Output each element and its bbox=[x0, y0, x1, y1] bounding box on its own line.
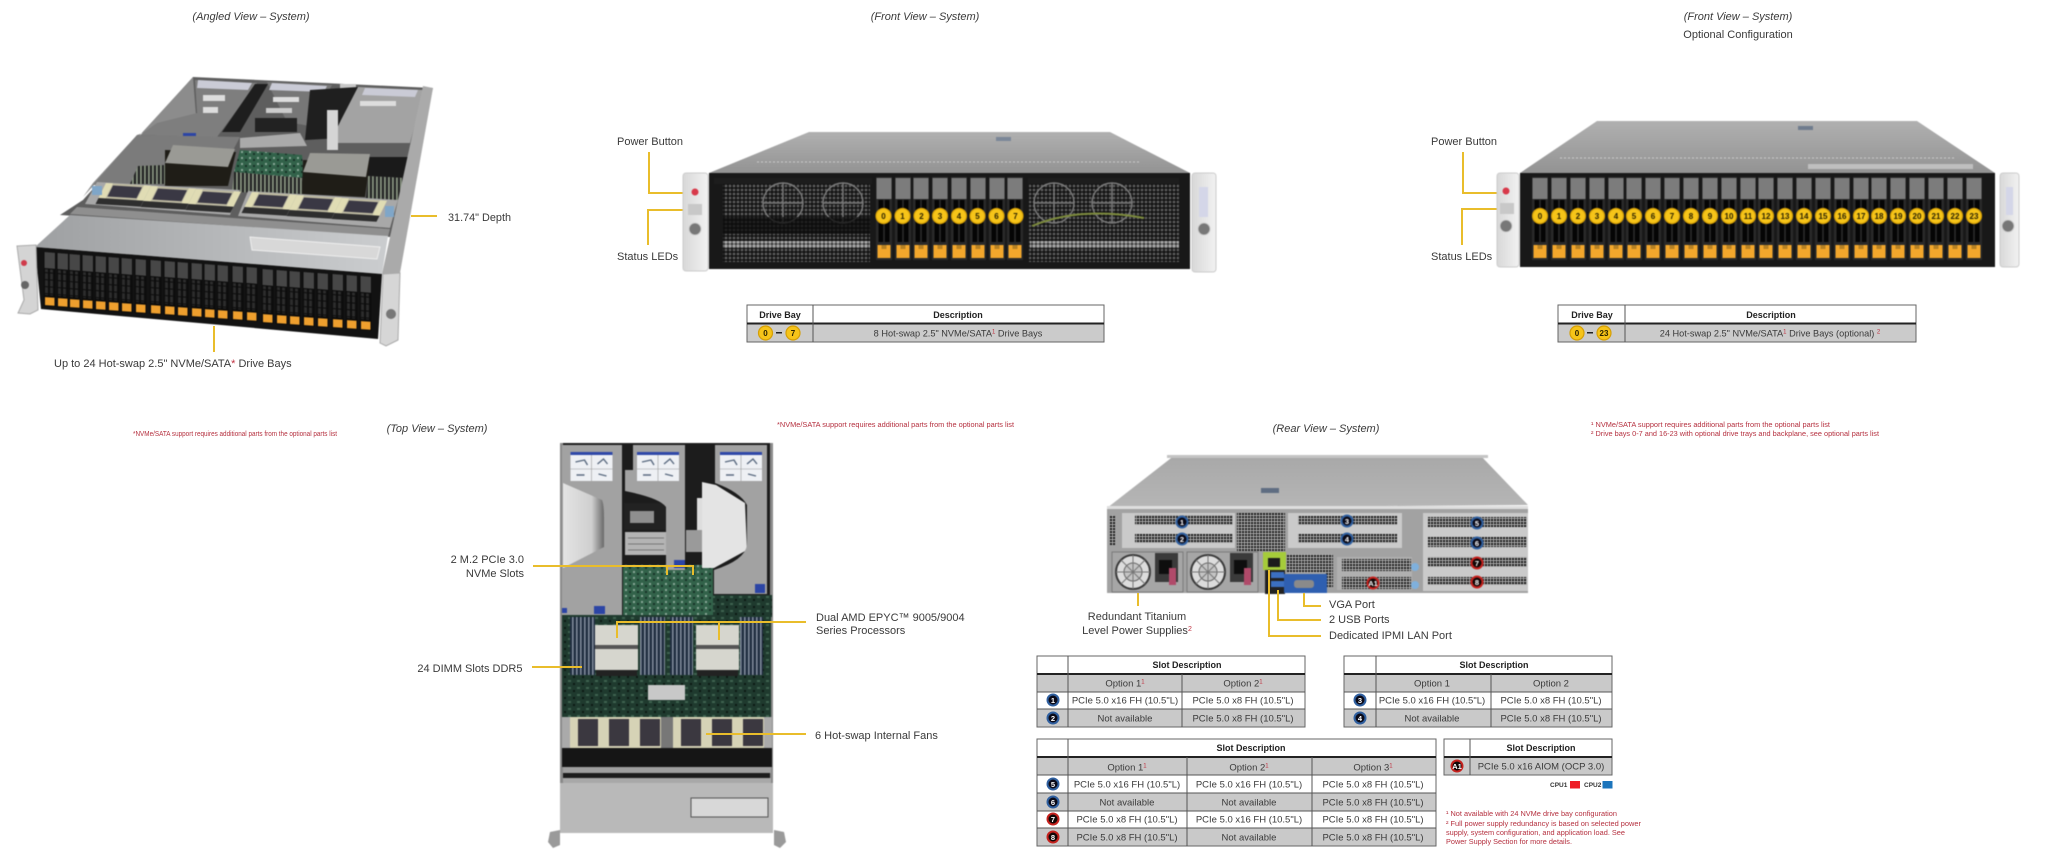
drive bays 0-7: 5 bbox=[975, 212, 980, 221]
drive bays 0-23: 6 bbox=[1651, 212, 1656, 221]
footnotes: rear view: supply, system configuration, and application load. See bbox=[1446, 830, 1625, 837]
riser: left bbox=[562, 445, 622, 615]
table: slots 5-8: PCIe 5.0 x8 FH (10.5"L) bbox=[1322, 832, 1424, 844]
callout: M.2 slots: 2 M.2 PCIe 3.0 bbox=[451, 554, 524, 566]
footnotes: rear view: Power Supply Section for more details. bbox=[1446, 839, 1572, 846]
table: slots 3-4: Option 1 bbox=[1414, 678, 1450, 690]
caption: front view optional configuration: Optional Configuration bbox=[1683, 29, 1793, 41]
footnote: top view left: *NVMe/SATA support requires additional parts from the optional parts list bbox=[133, 431, 337, 438]
callout: power button bbox=[617, 136, 687, 193]
drive bays 0-23: 1 bbox=[1557, 212, 1562, 221]
table: front drive bays: Drive Bays bbox=[995, 328, 1043, 338]
table: slots 3-4: 4 bbox=[1358, 714, 1363, 723]
top cover bbox=[35, 215, 388, 274]
rail bbox=[70, 207, 390, 237]
slot badges: 6 bbox=[1475, 539, 1479, 548]
slot badges: 8 bbox=[1475, 578, 1479, 587]
table: AIOM slot: PCIe 5.0 x16 AIOM (OCP 3.0) bbox=[1478, 762, 1604, 772]
drive bays 0-7 bbox=[876, 177, 1023, 260]
legend: CPU colours: CPU1 bbox=[1550, 782, 1568, 789]
footnotes: optional front view bbox=[1591, 422, 1879, 438]
photo: front view with 24 drive bays bbox=[1497, 121, 2019, 267]
callout: fans: 6 Hot-swap Internal Fans bbox=[815, 730, 938, 742]
front face bbox=[1520, 173, 1995, 267]
table: slots 5-8: PCIe 5.0 x8 FH (10.5"L) bbox=[1322, 780, 1424, 790]
table: optional drive bays: Drive Bay bbox=[1571, 310, 1613, 320]
front face bbox=[35, 247, 382, 339]
table: slots 3-4: Not available bbox=[1405, 714, 1459, 724]
drive bays 0-23: 22 bbox=[1951, 212, 1960, 221]
footnotes: rear view: ² Full power supply redundancy is based on selected power bbox=[1446, 821, 1642, 828]
AIOM slot bbox=[1337, 557, 1419, 590]
legend: CPU colours bbox=[1550, 781, 1612, 789]
PCIe block 3-4 bbox=[1288, 513, 1402, 548]
table: slots 5-8: Slot Description bbox=[1216, 743, 1286, 753]
callout: VGA port: VGA Port bbox=[1329, 599, 1375, 611]
VGA port bbox=[1284, 574, 1327, 593]
legend: CPU colours: CPU2 bbox=[1584, 782, 1602, 789]
callout: power supplies bbox=[1082, 593, 1192, 637]
callout: IPMI LAN port: Dedicated IPMI LAN Port bbox=[1329, 630, 1452, 642]
drive bays 0-23: 8 bbox=[1689, 212, 1694, 221]
table: slots 5-8: PCIe 5.0 x16 FH (10.5"L) bbox=[1196, 780, 1302, 790]
table: optional drive bays: 2 bbox=[1877, 330, 1881, 336]
table: slots 5-8: PCIe 5.0 x8 FH (10.5"L) bbox=[1322, 798, 1424, 808]
right rack ear bbox=[2000, 173, 2019, 267]
rear face bbox=[1107, 508, 1528, 593]
cpu heatsink: CPU 2 bbox=[302, 153, 370, 197]
drive bays 0-7: 6 bbox=[994, 212, 999, 221]
callout: M.2 slots bbox=[451, 554, 693, 580]
slot badges: A1 bbox=[1368, 579, 1378, 588]
drive bays 0-7: 2 bbox=[919, 212, 924, 221]
callout: USB ports bbox=[1278, 590, 1390, 626]
table: optional drive bays: 24 Hot-swap 2.5" NVMe/SATA bbox=[1660, 328, 1783, 338]
drive bays: 24 angled bbox=[44, 252, 372, 331]
riser: right bbox=[702, 445, 767, 594]
callout: power button optional bbox=[1431, 136, 1499, 193]
callout: VGA port bbox=[1304, 593, 1375, 611]
drive bays 0-23: 7 bbox=[1670, 212, 1675, 221]
callout: USB ports: 2 USB Ports bbox=[1329, 614, 1390, 626]
drive bays 0-7: 1 bbox=[900, 212, 905, 221]
drive bays 0-23: 21 bbox=[1932, 212, 1941, 221]
USB ports bbox=[1265, 570, 1285, 594]
slot badges: 7 bbox=[1475, 559, 1479, 568]
mesh panel left bbox=[714, 178, 872, 262]
caption: rear view: (Rear View – System) bbox=[1273, 423, 1380, 435]
table: optional drive bays bbox=[1558, 305, 1916, 342]
right rack ear bbox=[380, 273, 400, 346]
table: slots 1-2: Slot Description bbox=[1152, 660, 1222, 670]
caption: front view optional configuration: (Front View – System) bbox=[1684, 11, 1793, 23]
drive bays 0-23: 18 bbox=[1875, 212, 1884, 221]
table: slots 5-8: PCIe 5.0 x16 FH (10.5"L) bbox=[1074, 780, 1180, 790]
drive bays 0-23 bbox=[1532, 177, 1982, 260]
callout: power supplies: Level Power Supplies bbox=[1082, 625, 1188, 637]
chassis shell bbox=[60, 77, 433, 237]
table: slots 5-8: Not available bbox=[1222, 798, 1276, 808]
table: slots 5-8: PCIe 5.0 x8 FH (10.5"L) bbox=[1322, 814, 1424, 826]
fans bbox=[85, 182, 398, 228]
drive bays 0-7: 0 bbox=[881, 212, 886, 221]
table: slots 5-8: PCIe 5.0 x8 FH (10.5"L) bbox=[1076, 832, 1178, 844]
riser: middle bbox=[240, 82, 332, 148]
drive bays 0-23: 3 bbox=[1595, 212, 1600, 221]
table: slots 5-8: Option 3 bbox=[1353, 762, 1389, 774]
slot badges: 2 bbox=[1180, 535, 1184, 544]
table: slots 1-2: PCIe 5.0 x8 FH (10.5"L) bbox=[1192, 696, 1294, 706]
table: optional drive bays: 1 bbox=[1783, 330, 1787, 336]
table: slots 5-8: Not available bbox=[1222, 832, 1276, 844]
drive bays 0-23: 10 bbox=[1725, 212, 1734, 221]
callout: status LEDs bbox=[617, 210, 688, 263]
footnotes: rear view bbox=[1446, 811, 1642, 846]
drive bays 0-23: 0 bbox=[1538, 212, 1543, 221]
drive bays 0-23: 16 bbox=[1838, 212, 1847, 221]
drive bays 0-23: 14 bbox=[1800, 212, 1809, 221]
right wall bbox=[382, 86, 433, 274]
footnotes: optional front view: ¹ NVMe/SATA support requires additional parts from the optional parts list bbox=[1591, 422, 1830, 429]
right rack ear bbox=[1192, 173, 1216, 272]
mainboard bbox=[234, 150, 304, 178]
front face bbox=[709, 173, 1190, 269]
slot badges: 4 bbox=[1345, 535, 1350, 544]
slot badges: 5 bbox=[1475, 519, 1479, 528]
table: optional drive bays: 0 bbox=[1575, 329, 1580, 338]
cpu heatsink: CPU 1 bbox=[165, 145, 236, 186]
table: slots 1-2: 1 bbox=[1259, 680, 1263, 686]
centre mainboard bbox=[623, 565, 713, 617]
connector column bbox=[686, 498, 708, 552]
table: slots 3-4: Slot Description bbox=[1459, 660, 1529, 670]
table: slots 1-2: Option 2 bbox=[1223, 678, 1259, 690]
callout: M.2 slots: NVMe Slots bbox=[466, 568, 524, 580]
table: slots 5-8: Option 1 bbox=[1107, 762, 1143, 774]
photo: front view with 8 drive bays bbox=[683, 132, 1216, 272]
callout: depth: 31.74" Depth bbox=[448, 212, 511, 224]
drive bays 0-7: 7 bbox=[1013, 212, 1018, 221]
table: slots 1-2: 1 bbox=[1051, 696, 1055, 705]
riser: right bbox=[305, 87, 424, 150]
table: slots 1-2 bbox=[1037, 656, 1305, 727]
photo: rear view of chassis bbox=[1107, 455, 1528, 594]
table: slots 5-8: PCIe 5.0 x16 FH (10.5"L) bbox=[1196, 814, 1302, 826]
table: slots 5-8: PCIe 5.0 x8 FH (10.5"L) bbox=[1076, 814, 1178, 826]
drive bays 0-23: 2 bbox=[1576, 212, 1581, 221]
callout: depth bbox=[411, 212, 511, 224]
chassis top bbox=[1520, 121, 1995, 173]
drive bays 0-23: 5 bbox=[1632, 212, 1637, 221]
power supplies bbox=[1112, 552, 1258, 592]
drive bays 0-7: 3 bbox=[938, 212, 943, 221]
callout: status LEDs optional: Status LEDs bbox=[1431, 251, 1493, 263]
caption: angled view: (Angled View – System) bbox=[192, 11, 310, 23]
table: front drive bays: Drive Bay bbox=[759, 310, 801, 320]
slot badges: 3 bbox=[1345, 517, 1349, 526]
table: slots 1-2: 1 bbox=[1141, 680, 1145, 686]
caption: top view: (Top View – System) bbox=[387, 423, 488, 435]
table: slots 5-8: 1 bbox=[1389, 764, 1393, 770]
drive bays 0-23: 4 bbox=[1614, 212, 1619, 221]
mesh panel right bbox=[1028, 178, 1179, 262]
drive bays 0-23: 11 bbox=[1744, 212, 1753, 221]
footnotes: optional front view: ² Drive bays 0-7 and 16-23 with optional drive trays and backplane, see optional parts list bbox=[1591, 431, 1879, 438]
callout: power button optional: Power Button bbox=[1431, 136, 1497, 148]
table: front drive bays bbox=[747, 305, 1104, 342]
table: slots 3-4: 3 bbox=[1358, 696, 1362, 705]
drive bays 0-7: 4 bbox=[957, 212, 962, 221]
table: front drive bays: 8 Hot-swap 2.5" NVMe/SATA bbox=[874, 328, 992, 338]
callout: power supplies: 2 bbox=[1188, 626, 1192, 633]
callout: DIMM slots: 24 DIMM Slots DDR5 bbox=[417, 663, 522, 675]
PCIe block 5-8 bbox=[1423, 513, 1528, 591]
drive bays 0-23: 9 bbox=[1708, 212, 1713, 221]
table: slots 3-4: PCIe 5.0 x8 FH (10.5"L) bbox=[1500, 696, 1602, 706]
table: slots 5-8: 8 bbox=[1051, 833, 1055, 842]
drive bays 0-23: 13 bbox=[1781, 212, 1790, 221]
table: slots 3-4: Option 2 bbox=[1533, 678, 1569, 690]
table: slots 1-2: Not available bbox=[1098, 714, 1152, 724]
callout: IPMI LAN port bbox=[1269, 570, 1452, 642]
photo: angled view of server chassis bbox=[17, 77, 433, 346]
caption: front view: (Front View – System) bbox=[871, 11, 980, 23]
table: AIOM slot: A1 bbox=[1452, 762, 1462, 771]
callout: status LEDs: Status LEDs bbox=[617, 251, 679, 263]
IPMI LAN port bbox=[1263, 552, 1286, 570]
callout: processors: Dual AMD EPYC™ 9005/9004 bbox=[816, 612, 965, 624]
left rack ear bbox=[17, 245, 38, 314]
DIMM slots bbox=[570, 617, 763, 675]
table: slots 5-8: 6 bbox=[1051, 798, 1055, 807]
riser: middle bbox=[624, 445, 685, 570]
table: optional drive bays: Description bbox=[1746, 310, 1796, 320]
caption: front view optional configuration bbox=[1683, 11, 1793, 41]
drive bays 0-23: 23 bbox=[1970, 212, 1979, 221]
drive bays 0-23: 12 bbox=[1762, 212, 1771, 221]
table: slots 5-8: 5 bbox=[1051, 780, 1055, 789]
table: AIOM slot bbox=[1444, 739, 1612, 775]
PCIe block 1-2 bbox=[1122, 513, 1235, 548]
callout: power button: Power Button bbox=[617, 136, 683, 148]
left wall bbox=[83, 77, 196, 197]
callout: processors bbox=[617, 612, 965, 640]
table: slots 5-8: 1 bbox=[1143, 764, 1147, 770]
table: front drive bays: Description bbox=[933, 310, 983, 320]
footnotes: rear view: ¹ Not available with 24 NVMe drive bay configuration bbox=[1446, 811, 1617, 818]
table: slots 3-4: PCIe 5.0 x8 FH (10.5"L) bbox=[1500, 714, 1602, 724]
callout: drive bays: Up to 24 Hot-swap 2.5" NVMe/SATA* Drive Bays bbox=[54, 358, 292, 370]
left rack ear bbox=[1497, 173, 1519, 267]
left rack ear bbox=[683, 173, 708, 271]
table: slots 1-2: 2 bbox=[1051, 714, 1055, 723]
table: slots 5-8 bbox=[1037, 739, 1436, 846]
fan band bbox=[562, 717, 772, 748]
table: slots 5-8: 1 bbox=[1265, 764, 1269, 770]
footnote: front view: *NVMe/SATA support requires additional parts from the optional parts list bbox=[777, 422, 1014, 429]
slot badges bbox=[1176, 516, 1482, 588]
photo: top view of chassis bbox=[548, 443, 786, 848]
table: optional drive bays: Drive Bays (optional) bbox=[1787, 328, 1877, 338]
drive bays 0-23: 19 bbox=[1894, 212, 1903, 221]
CPU heatsinks bbox=[595, 625, 739, 676]
table: slots 1-2: PCIe 5.0 x16 FH (10.5"L) bbox=[1072, 696, 1178, 706]
front ears bbox=[548, 830, 786, 848]
drive bays 0-23: 15 bbox=[1819, 212, 1828, 221]
drive bays 0-23: 20 bbox=[1913, 212, 1922, 221]
table: slots 3-4 bbox=[1344, 656, 1612, 727]
table: slots 3-4: PCIe 5.0 x16 FH (10.5"L) bbox=[1379, 696, 1485, 706]
table: slots 5-8: Option 2 bbox=[1229, 762, 1265, 774]
table: front drive bays: 7 bbox=[791, 329, 796, 338]
table: slots 5-8: Not available bbox=[1100, 798, 1154, 808]
table: AIOM slot: Slot Description bbox=[1506, 743, 1576, 753]
riser: left bbox=[140, 80, 257, 137]
table: optional drive bays: 23 bbox=[1600, 329, 1609, 338]
slot badges: 1 bbox=[1180, 518, 1184, 527]
callout: processors: Series Processors bbox=[816, 625, 906, 637]
table: front drive bays: 1 bbox=[992, 330, 996, 336]
chassis top bbox=[709, 132, 1190, 173]
table: slots 1-2: PCIe 5.0 x8 FH (10.5"L) bbox=[1192, 714, 1294, 724]
table: slots 5-8: 7 bbox=[1051, 815, 1055, 824]
drive bays 0-23: 17 bbox=[1857, 212, 1866, 221]
callout: power supplies: Redundant Titanium bbox=[1088, 611, 1186, 623]
lower mainboard bbox=[562, 615, 771, 717]
rear rails bbox=[562, 748, 772, 783]
callout: status LEDs optional bbox=[1431, 209, 1501, 263]
table: slots 1-2: Option 1 bbox=[1105, 678, 1141, 690]
front cover plate bbox=[560, 783, 773, 833]
chassis top bbox=[1107, 455, 1528, 508]
table: front drive bays: 0 bbox=[763, 329, 768, 338]
